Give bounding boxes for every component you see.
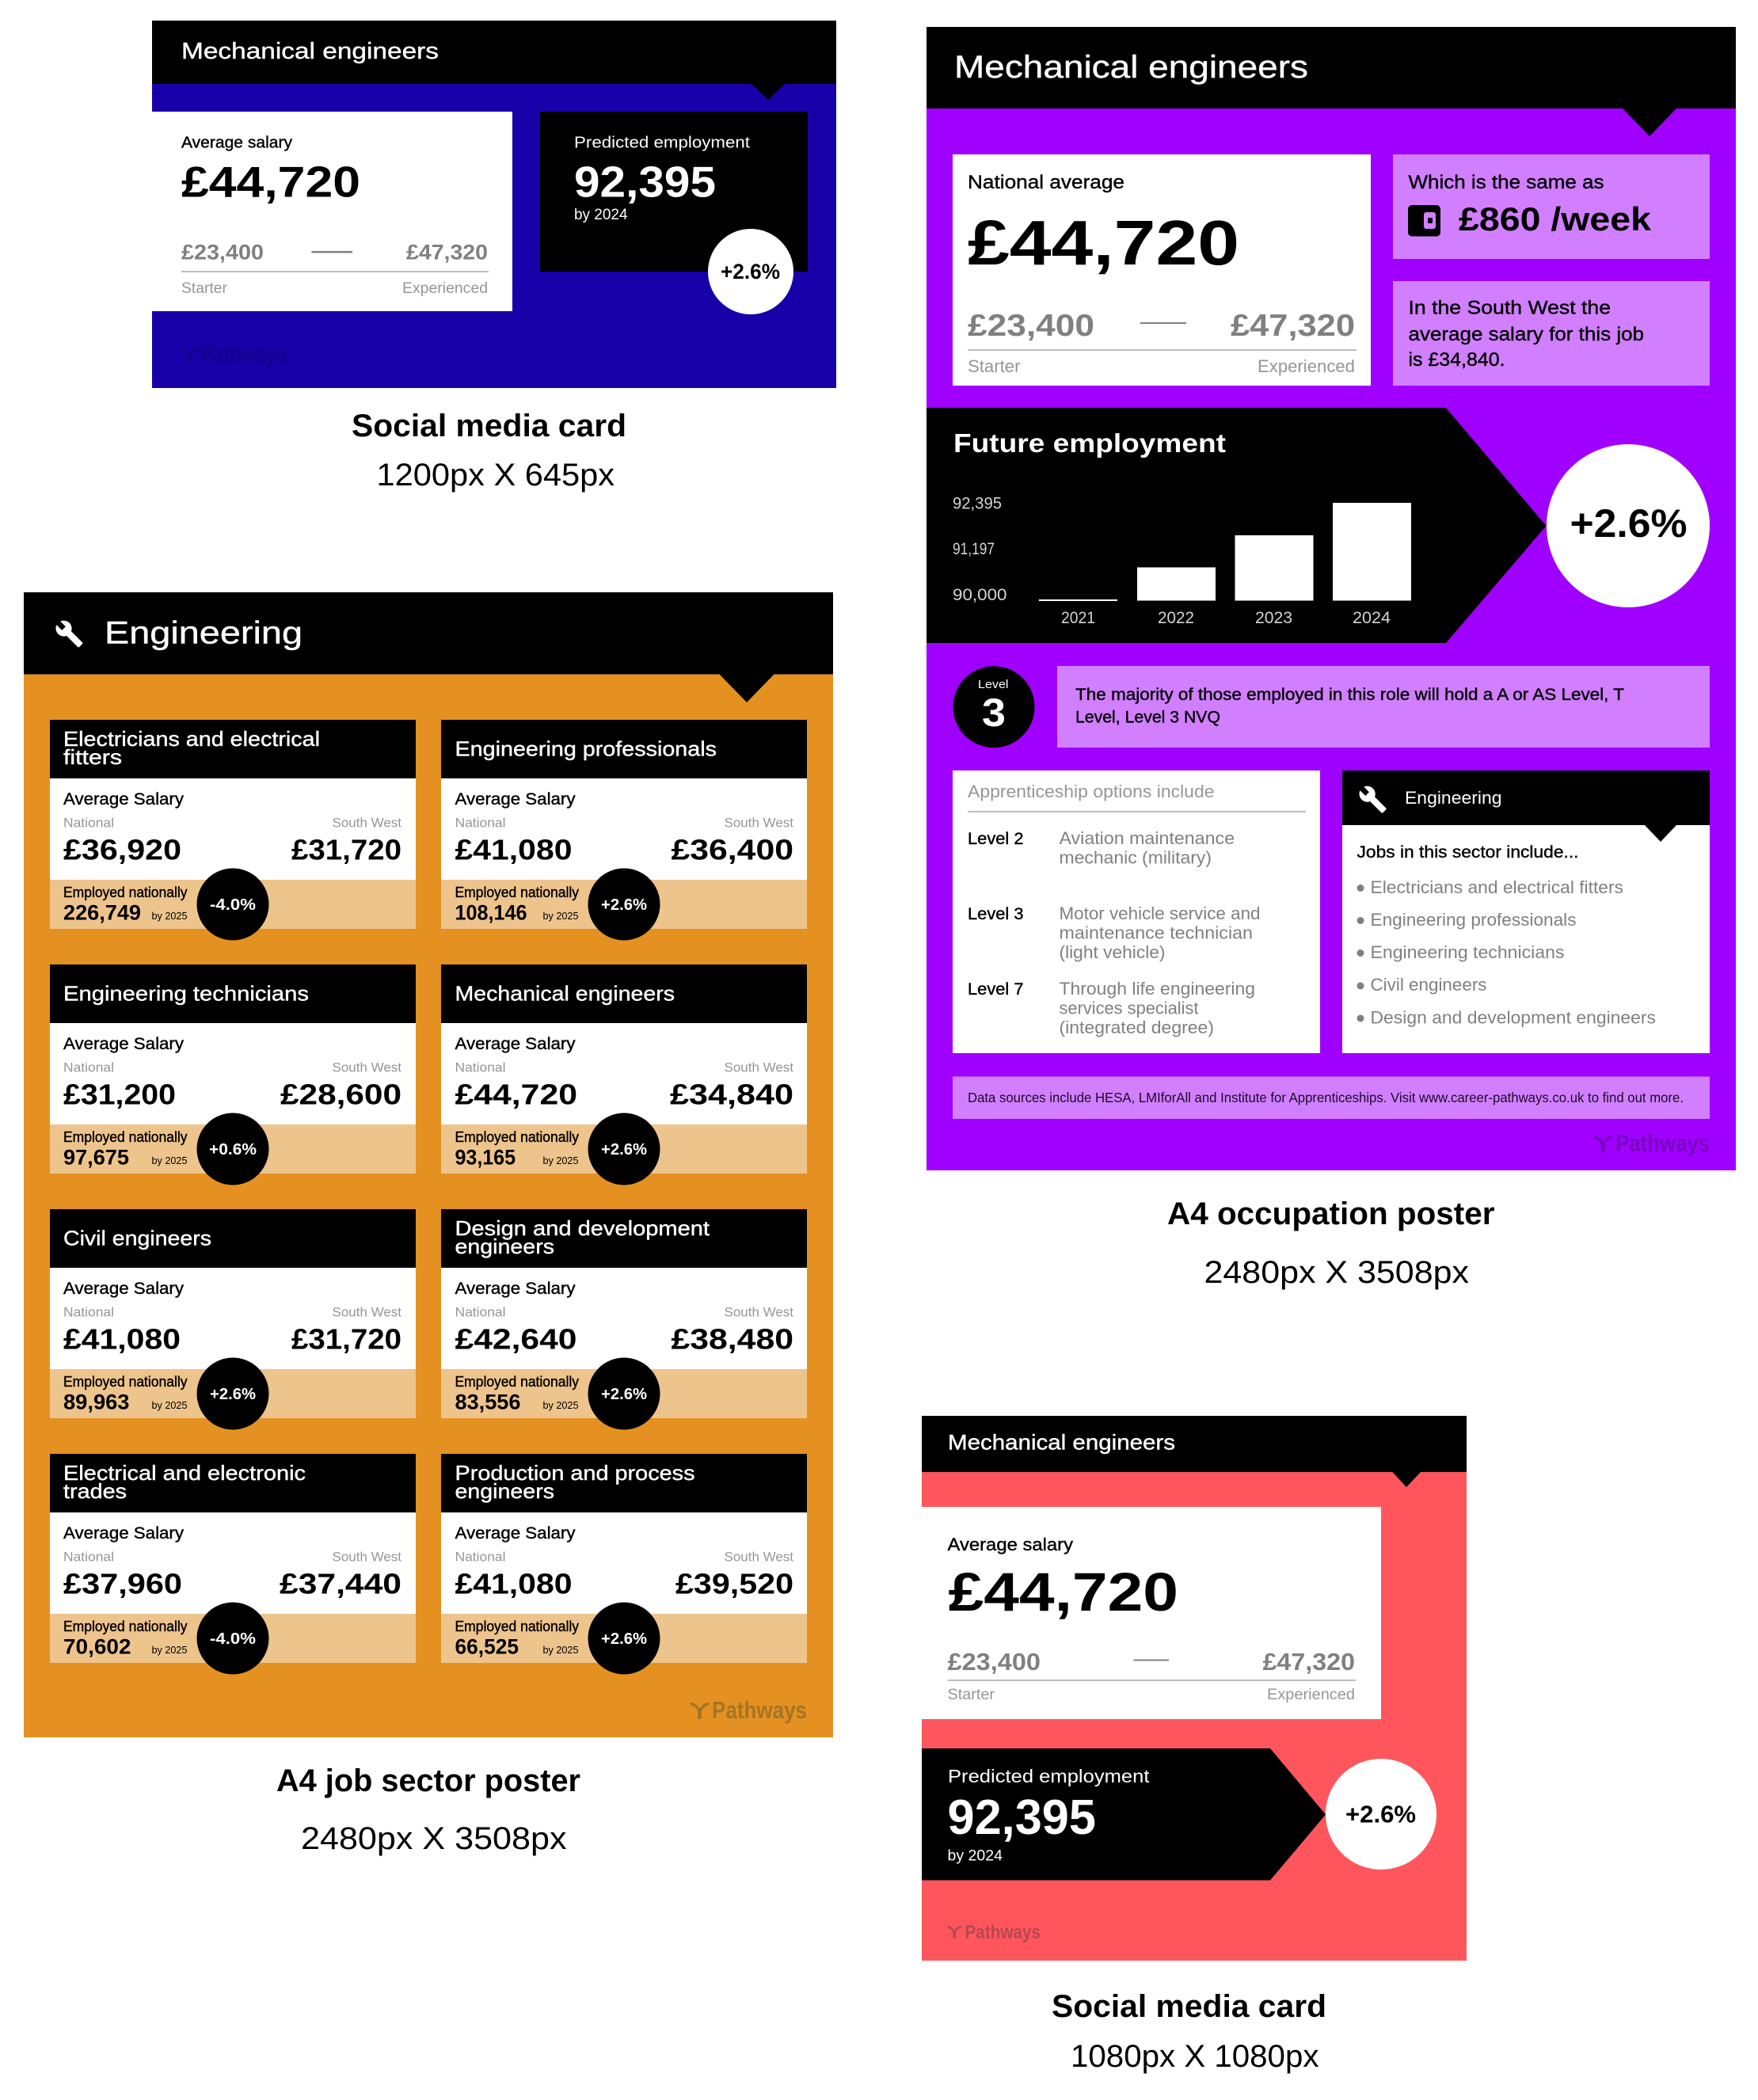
- predicted employment panel: 92,395: [574, 157, 716, 206]
- salary panel: £44,720: [181, 157, 360, 206]
- job card: Mechanical engineers: by 2025: [543, 1155, 578, 1166]
- apprenticeship options panel: Motor vehicle service and: [1060, 904, 1261, 923]
- regional salary panel: [1393, 281, 1710, 386]
- job card: Civil engineers: by 2025: [152, 1399, 187, 1411]
- logo: Pathways: Pathways: [201, 340, 287, 368]
- job card: Engineering technicians: Engineering technicians: [63, 982, 309, 1006]
- bar chart: 91,197: [953, 540, 995, 558]
- job card: Civil engineers: 89,963: [63, 1390, 130, 1414]
- weekly pay panel: £860 /week: [1459, 200, 1652, 238]
- job card: Mechanical engineers: [441, 964, 807, 1185]
- growth badge: +2.6%: [1570, 501, 1687, 546]
- job card: Design and development engineers: 83,556: [455, 1390, 521, 1414]
- job card: Civil engineers: [50, 1209, 416, 1430]
- national average panel: £47,320: [1231, 309, 1355, 343]
- job card: Production and process engineers: by 2025: [543, 1644, 578, 1656]
- job card: Electricians and electrical fitters: Employed nationally: [63, 885, 187, 900]
- job card: Engineering technicians: [50, 964, 416, 1185]
- job card: Civil engineers: Civil engineers: [63, 1226, 211, 1250]
- apprenticeship options panel: Level 3: [968, 905, 1023, 923]
- regional salary panel: is £34,840.: [1408, 349, 1505, 371]
- qualification text panel: The majority of those employed in this role will hold a A or AS Level, T: [1075, 686, 1624, 704]
- job card: Engineering professionals: 108,146: [455, 901, 527, 925]
- job card: Production and process engineers: [441, 1454, 807, 1674]
- apprenticeship options panel: (integrated degree): [1060, 1018, 1214, 1037]
- apprenticeship options panel: Through life engineering: [1060, 979, 1255, 999]
- job card: Mechanical engineers: £44,720: [455, 1079, 577, 1110]
- card header: Mechanical engineers: [948, 1430, 1175, 1454]
- bar chart: 2023: [1255, 609, 1292, 627]
- job card: Engineering professionals: £36,400: [672, 833, 793, 866]
- panel: blue social media card: [152, 21, 836, 388]
- job card: Production and process engineers: South West: [724, 1550, 793, 1565]
- sector jobs panel: Engineering technicians: [1370, 942, 1565, 962]
- sector jobs panel: Engineering professionals: [1370, 910, 1576, 930]
- job card: Civil engineers: Employed nationally: [63, 1374, 187, 1390]
- job card: Design and development engineers: engineers: [455, 1235, 554, 1258]
- salary panel: [152, 112, 512, 311]
- job card: Mechanical engineers: 93,165: [455, 1145, 516, 1169]
- job card: Mechanical engineers: National: [455, 1061, 505, 1075]
- apprenticeship options panel: Level 2: [968, 830, 1023, 848]
- job card: Production and process engineers: £41,080: [455, 1568, 572, 1600]
- icon: wallet: [1408, 205, 1440, 236]
- qualification level badge: Level: [978, 678, 1009, 691]
- qualification level badge: 3: [982, 690, 1006, 735]
- job card: Engineering professionals: [441, 720, 807, 941]
- salary panel: Starter: [947, 1687, 995, 1703]
- qualification text panel: Level, Level 3 NVQ: [1075, 708, 1220, 727]
- predicted employment panel: [540, 112, 808, 272]
- growth badge: [1547, 444, 1710, 607]
- job card: Design and development engineers: Employed nationally: [455, 1374, 579, 1390]
- bar chart: 92,395: [953, 494, 1002, 513]
- salary panel: £44,720: [949, 1562, 1178, 1623]
- job card: Production and process engineers: engineers: [455, 1479, 554, 1503]
- data sources panel: Data sources include HESA, LMIforAll and Institute for Apprenticeships. Visit www.career-pathways.co.uk to find out more.: [968, 1090, 1684, 1105]
- job card: Engineering professionals: +2.6%: [601, 896, 647, 914]
- qualification level badge: [953, 666, 1034, 748]
- job card: Mechanical engineers: +2.6%: [601, 1141, 647, 1158]
- predicted employment arrow panel: by 2024: [947, 1848, 1003, 1864]
- panel: purple occupation poster: [927, 27, 1736, 1170]
- job card: Design and development engineers: National: [455, 1305, 505, 1319]
- card header: Mechanical engineers: [181, 39, 439, 64]
- job card: Electricians and electrical fitters: £36,920: [63, 833, 181, 866]
- sector jobs panel: Engineering: [1405, 788, 1501, 808]
- job card: Civil engineers: Average Salary: [63, 1280, 185, 1298]
- job card: Production and process engineers: 66,525: [455, 1634, 519, 1658]
- job card: Engineering technicians: by 2025: [152, 1155, 187, 1166]
- job card: Design and development engineers: £38,480: [672, 1322, 793, 1356]
- apprenticeship options panel: Aviation maintenance: [1060, 828, 1235, 848]
- apprenticeship options panel: Level 7: [968, 980, 1023, 999]
- caption: A4 job sector poster: A4 job sector poster: [276, 1763, 580, 1798]
- job card: Electrical and electronic trades: South West: [333, 1550, 401, 1565]
- job card: Mechanical engineers: South West: [724, 1061, 793, 1075]
- bar chart: 2021: [1061, 609, 1095, 627]
- data sources panel: [953, 1077, 1710, 1119]
- caption: A4 occupation poster: 2480px X 3508px: [1204, 1255, 1469, 1290]
- salary panel: Experienced: [402, 280, 488, 297]
- logo: Pathways: [181, 340, 287, 368]
- job card: Engineering professionals: £41,080: [455, 833, 572, 866]
- caption: A4 job sector poster: 2480px X 3508px: [301, 1821, 567, 1856]
- card header: [922, 1416, 1467, 1487]
- bar chart: 2022: [1158, 609, 1194, 627]
- sector jobs panel: Jobs in this sector include...: [1357, 843, 1579, 862]
- logo: Pathways: Pathways: [965, 1922, 1041, 1943]
- job card: Civil engineers: +2.6%: [210, 1386, 256, 1403]
- caption: A4 job sector poster: [276, 1763, 580, 1856]
- growth badge: +2.6%: [721, 260, 780, 283]
- job card: Electricians and electrical fitters: £31,720: [291, 833, 401, 866]
- predicted employment panel: Predicted employment: [574, 135, 750, 152]
- job card: Design and development engineers: Design and development: [455, 1216, 710, 1240]
- growth badge: [1326, 1759, 1436, 1870]
- job card: Engineering professionals: National: [455, 816, 505, 830]
- regional salary panel: In the South West the: [1408, 298, 1611, 318]
- salary panel: Average salary: [947, 1535, 1073, 1554]
- job card: Mechanical engineers: Average Salary: [455, 1035, 576, 1053]
- poster header: Engineering: [105, 616, 303, 651]
- sector jobs panel: [1342, 770, 1710, 1053]
- job card: Design and development engineers: +2.6%: [601, 1386, 647, 1403]
- job card: Mechanical engineers: £34,840: [670, 1079, 793, 1110]
- job card: Electricians and electrical fitters: [50, 720, 416, 941]
- job card: Engineering technicians: +0.6%: [209, 1141, 257, 1158]
- job card: Electricians and electrical fitters: by 2025: [152, 910, 187, 922]
- national average panel: National average: [968, 172, 1124, 193]
- caption: A4 occupation poster: A4 occupation poster: [1167, 1196, 1495, 1231]
- predicted employment arrow panel: 92,395: [947, 1790, 1096, 1845]
- bar chart: 90,000: [953, 586, 1007, 604]
- job card: Production and process engineers: National: [455, 1550, 505, 1565]
- bar chart: 2024: [1353, 609, 1391, 627]
- predicted employment panel: by 2024: [574, 207, 628, 223]
- job card: Engineering technicians: Employed nationally: [63, 1129, 187, 1145]
- job card: Electrical and electronic trades: Electrical and electronic: [63, 1461, 306, 1485]
- job card: Electricians and electrical fitters: fitters: [63, 745, 122, 769]
- bar chart: [953, 494, 1411, 627]
- predicted employment arrow panel: [922, 1748, 1326, 1880]
- salary panel: £47,320: [406, 241, 488, 264]
- job card: Engineering professionals: Average Salary: [455, 790, 576, 808]
- sector jobs panel: Civil engineers: [1370, 975, 1487, 995]
- salary panel: [922, 1507, 1381, 1719]
- job card: Electrical and electronic trades: Employed nationally: [63, 1619, 187, 1634]
- apprenticeship options panel: services specialist: [1060, 998, 1199, 1018]
- caption: social media card 1080: Social media card: [1052, 1989, 1326, 2024]
- salary panel: Starter: [181, 280, 228, 297]
- job card: Electrical and electronic trades: £37,440: [280, 1568, 401, 1600]
- job card: Engineering technicians: 97,675: [63, 1145, 129, 1169]
- job card: Electrical and electronic trades: [50, 1454, 416, 1674]
- poster header: Mechanical engineers: [954, 50, 1308, 85]
- apprenticeship options panel: [953, 770, 1320, 1053]
- job card: Civil engineers: National: [63, 1305, 114, 1319]
- caption: A4 occupation poster: [1167, 1196, 1495, 1290]
- job card: Electricians and electrical fitters: National: [63, 816, 114, 830]
- job card: Electrical and electronic trades: 70,602: [63, 1634, 131, 1658]
- caption: social media card 1080: [1052, 1989, 1326, 2074]
- national average panel: £23,400: [968, 309, 1094, 343]
- national average panel: [953, 154, 1371, 386]
- card header: [152, 21, 836, 100]
- job card: Engineering professionals: by 2025: [543, 910, 578, 922]
- job card: Civil engineers: £31,720: [291, 1322, 401, 1356]
- job card: Design and development engineers: South West: [724, 1305, 793, 1319]
- job card: Electricians and electrical fitters: -4.0%: [210, 896, 256, 914]
- job card: Engineering technicians: Average Salary: [63, 1035, 185, 1053]
- job card: Electricians and electrical fitters: Average Salary: [63, 790, 185, 808]
- job card: Electrical and electronic trades: National: [63, 1550, 114, 1565]
- job card: Production and process engineers: Production and process: [455, 1461, 695, 1485]
- apprenticeship options panel: Apprenticeship options include: [968, 782, 1215, 801]
- salary panel: Average salary: [181, 135, 292, 152]
- job card: Electrical and electronic trades: trades: [63, 1479, 127, 1503]
- job card: Civil engineers: South West: [333, 1305, 401, 1319]
- job card: Production and process engineers: +2.6%: [601, 1630, 647, 1648]
- job card: Design and development engineers: £42,640: [455, 1322, 576, 1356]
- job card: Electrical and electronic trades: Average Salary: [63, 1524, 185, 1543]
- salary panel: £23,400: [181, 241, 264, 264]
- caption: social media card 1200: Social media card: [352, 409, 626, 443]
- job card: Engineering technicians: £31,200: [63, 1079, 176, 1110]
- job card: Electricians and electrical fitters: Electricians and electrical: [63, 727, 320, 751]
- growth badge: +2.6%: [1345, 1801, 1416, 1828]
- caption: social media card 1200: [352, 409, 626, 493]
- national average panel: £44,720: [968, 207, 1239, 278]
- job card: Engineering technicians: £28,600: [280, 1079, 401, 1110]
- national average panel: Starter: [968, 356, 1020, 376]
- salary panel: £47,320: [1262, 1648, 1355, 1676]
- job card: Engineering professionals: South West: [724, 816, 793, 830]
- poster header: [927, 27, 1736, 136]
- job card: Design and development engineers: by 2025: [543, 1399, 578, 1411]
- job card: Engineering professionals: Engineering professionals: [455, 736, 717, 760]
- weekly pay panel: [1393, 154, 1710, 259]
- qualification text panel: [1057, 666, 1710, 748]
- job card: Production and process engineers: £39,520: [675, 1568, 793, 1600]
- salary panel: £23,400: [947, 1648, 1041, 1676]
- job card: Electricians and electrical fitters: 226,749: [63, 901, 141, 925]
- job card: Engineering technicians: South West: [333, 1061, 401, 1075]
- national average panel: Experienced: [1258, 356, 1355, 376]
- job card: Design and development engineers: [441, 1209, 807, 1430]
- job card: Electrical and electronic trades: by 2025: [152, 1644, 187, 1656]
- job card: Production and process engineers: Employed nationally: [455, 1619, 579, 1634]
- job card: Engineering technicians: National: [63, 1061, 114, 1075]
- icon: wrench: [1359, 786, 1387, 813]
- job card: Electricians and electrical fitters: South West: [333, 816, 401, 830]
- apprenticeship options panel: (light vehicle): [1060, 942, 1166, 962]
- job card: Electrical and electronic trades: £37,960: [63, 1568, 182, 1600]
- job card: Production and process engineers: Average Salary: [455, 1524, 576, 1543]
- apprenticeship options panel: maintenance technician: [1060, 923, 1253, 942]
- panel: red social media card: [922, 1416, 1467, 1961]
- logo: Pathways: Pathways: [712, 1696, 807, 1724]
- job card: Electrical and electronic trades: -4.0%: [210, 1630, 256, 1648]
- salary panel: Experienced: [1267, 1687, 1355, 1703]
- future employment arrow panel: Future employment: [953, 428, 1226, 458]
- job card: Design and development engineers: Average Salary: [455, 1280, 576, 1298]
- regional salary panel: average salary for this job: [1408, 324, 1644, 345]
- future employment arrow panel: [927, 408, 1546, 643]
- caption: social media card 1200: 1200px X 645px: [377, 458, 615, 493]
- sector jobs panel: Design and development engineers: [1370, 1007, 1656, 1028]
- logo: Pathways: [1593, 1129, 1710, 1157]
- growth badge: [708, 229, 793, 314]
- sector jobs panel: Electricians and electrical fitters: [1370, 877, 1623, 897]
- job card: Mechanical engineers: Employed nationally: [455, 1129, 579, 1145]
- caption: social media card 1080: 1080px X 1080px: [1071, 2039, 1319, 2074]
- logo: Pathways: Pathways: [1615, 1129, 1710, 1157]
- poster header: [24, 592, 833, 702]
- panel: orange job sector poster: [24, 592, 833, 1737]
- job card: Engineering professionals: Employed nationally: [455, 885, 579, 900]
- apprenticeship options panel: mechanic (military): [1060, 847, 1212, 868]
- weekly pay panel: Which is the same as: [1408, 172, 1604, 193]
- job card: Mechanical engineers: Mechanical engineers: [455, 982, 675, 1006]
- predicted employment arrow panel: Predicted employment: [948, 1766, 1150, 1786]
- job card: Civil engineers: £41,080: [63, 1322, 181, 1356]
